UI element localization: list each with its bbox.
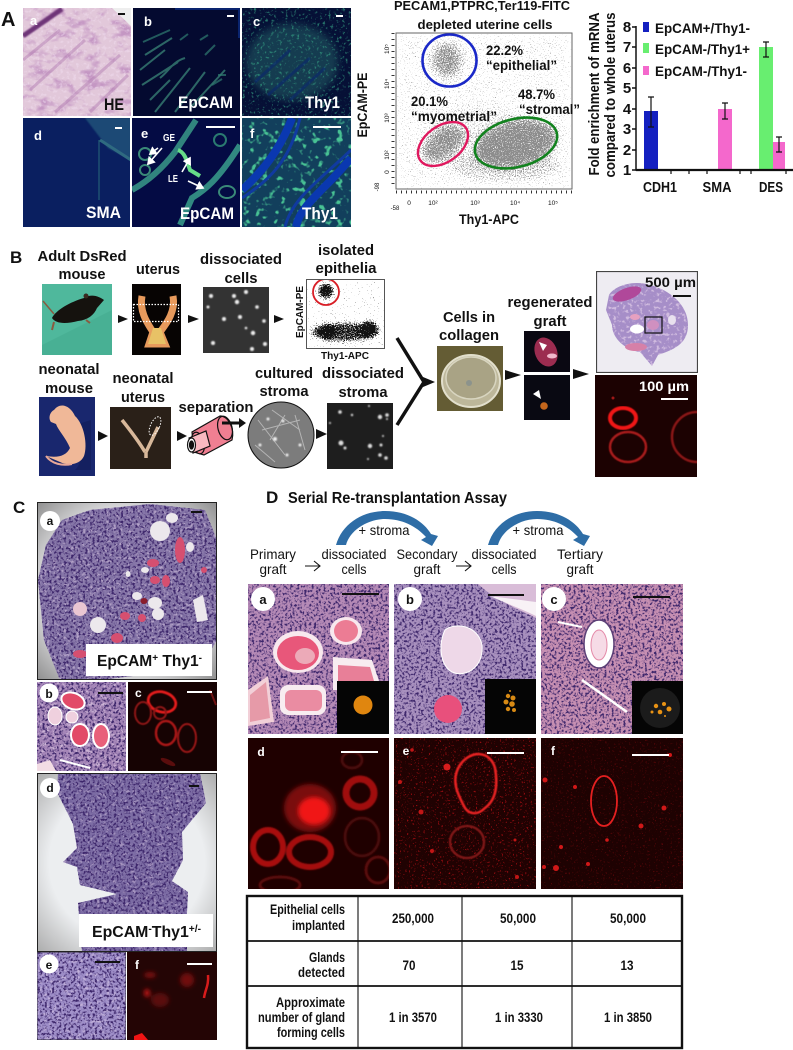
step label: separation: separation (178, 400, 254, 416)
flow plot title: depleted uterine cells (418, 17, 552, 32)
step label: adult mouse: Adult DsRed (38, 249, 127, 265)
micrograph b: EpCAM: b (144, 14, 152, 29)
micrograph f: Thy1: f (250, 126, 255, 141)
arrow: separation to culture (222, 418, 246, 428)
panel D title: Serial Re-transplantation Assay (288, 490, 507, 507)
histology a: primary graft (248, 584, 389, 734)
micrograph b: EpCAM: EpCAM (178, 93, 233, 112)
panel letter C: C (13, 498, 25, 517)
panel letter D: D (266, 488, 278, 507)
gate labels: “stromal” (519, 101, 580, 117)
row: gland forming cells: number of gland (258, 1010, 345, 1025)
fluorescence d: primary graft: d (257, 745, 265, 759)
row: gland forming cells (258, 995, 652, 1040)
results table (247, 896, 682, 1048)
row: epithelial cells implanted: 50,000 (500, 911, 536, 926)
micrograph d: SMA (23, 118, 130, 227)
graft series labels: Primary (250, 546, 296, 562)
step label: neonatal mouse: mouse (45, 381, 93, 397)
arrows: top row (98, 315, 327, 441)
y-axis title (587, 12, 619, 178)
micrograph a: HE (23, 8, 131, 116)
flow axes ticks and labels (375, 33, 572, 212)
bar category labels: DES (759, 180, 783, 196)
fluorescence e: secondary graft: e (403, 744, 410, 758)
flow x-axis label: Thy1-APC (459, 211, 519, 227)
row: epithelial cells implanted: implanted (292, 918, 345, 933)
panel B workflow (10, 243, 722, 477)
photo: dissociated cells (203, 287, 269, 353)
row: gland forming cells: forming cells (277, 1025, 345, 1040)
photo: neonatal mouse (39, 397, 95, 476)
histology e: stroma only: e (46, 958, 53, 972)
axis labels: isolated epithelia flow plot (295, 286, 369, 362)
fluorescence f: stroma only (127, 952, 217, 1040)
axis labels: isolated epithelia flow plot: EpCAM-PE (295, 286, 306, 338)
bar chart: fold enrichment (587, 12, 793, 196)
step label: isolated epithelia (316, 243, 377, 277)
axis labels: isolated epithelia flow plot: Thy1-APC (321, 351, 369, 362)
histology b: secondary graft: b (406, 592, 414, 607)
arrow: graft to histology (573, 369, 589, 379)
photo: graft on kidney (524, 331, 570, 372)
photo: cultured stroma dish (248, 402, 314, 468)
histology b: secondary graft (394, 584, 536, 734)
photo: dissociated stroma (327, 403, 393, 469)
step label: neonatal mouse (38, 362, 100, 397)
stroma labels: + stroma (512, 522, 564, 538)
gate labels (411, 42, 580, 124)
gate labels: 48.7% (518, 86, 556, 102)
step label: regenerated graft: graft (534, 314, 567, 330)
flow axes ticks and labels: 0 (407, 200, 411, 207)
step label: uterus: uterus (136, 262, 180, 278)
inset: orange graft (337, 681, 389, 734)
y-axis numbers: 7 (623, 39, 631, 56)
step label: neonatal mouse: neonatal (38, 362, 100, 378)
inset: dotted graft (632, 681, 683, 734)
micrograph c: Thy1: c (253, 14, 260, 29)
legend: EpCAM-/Thy1- (655, 63, 747, 79)
row: epithelial cells implanted: 50,000 (610, 911, 646, 926)
row: epithelial cells implanted (270, 902, 646, 933)
fluorescence f: tertiary graft: f (551, 744, 556, 758)
legend: EpCAM+/Thy1- (655, 20, 750, 36)
y-axis numbers: 8 (623, 19, 631, 36)
step label: neonatal uterus: neonatal (112, 371, 174, 387)
histology a: EpCAM+ Thy1- graft: a (47, 514, 54, 528)
step label: cultured stroma: stroma (260, 384, 309, 400)
fluorescence of graft: 100 µm (639, 378, 689, 394)
y-axis numbers (623, 19, 632, 179)
legend (643, 20, 750, 79)
graft series labels: dissociated (472, 546, 536, 562)
legend: EpCAM-/Thy1+ (655, 41, 750, 57)
histology of graft (596, 271, 698, 373)
histology d: EpCAM- Thy1+/- graft: - (148, 924, 152, 935)
histology d: EpCAM- Thy1+/- graft (37, 773, 217, 952)
flow axes ticks and labels: 10³ (384, 112, 391, 123)
y-axis title: Fold enrichment of mRNA (587, 12, 603, 176)
flow axes ticks and labels: 10⁴ (384, 79, 391, 89)
graft series labels: graft (566, 561, 594, 577)
micrograph a: HE: a (30, 13, 38, 28)
gate labels: 22.2% (486, 42, 524, 58)
micrograph e: EpCAM with GE and LE arrows: e (141, 126, 148, 141)
flow axes ticks and labels: 10⁵ (384, 44, 391, 54)
step label: regenerated graft: regenerated (508, 295, 592, 311)
gate: stromal (469, 110, 563, 176)
y-axis numbers: 5 (623, 80, 631, 97)
flow axes ticks and labels: 0 (384, 170, 391, 174)
y-axis numbers: 3 (623, 121, 631, 138)
fluorescence c: glands (128, 682, 217, 771)
histology d: EpCAM- Thy1+/- graft: d (46, 781, 54, 795)
histology b: glands (37, 682, 126, 771)
bar category labels: SMA (702, 180, 732, 196)
micrograph e: EpCAM with GE and LE arrows: LE (168, 173, 178, 185)
step label: cells in collagen: Cells in (443, 310, 495, 326)
bar category labels: CDH1 (643, 180, 677, 196)
flow axes ticks and labels: 10² (384, 149, 391, 160)
chevron: merging cell streams (397, 338, 435, 425)
fluorescence f: stroma only: f (135, 958, 140, 972)
flow plot title (394, 0, 571, 32)
histology d: EpCAM- Thy1+/- graft: Thy1 (152, 924, 189, 941)
y-axis numbers: 1 (623, 162, 631, 179)
micrograph c: Thy1 (242, 8, 351, 116)
panel D (247, 488, 683, 1048)
step label: isolated epithelia: epithelia (316, 261, 377, 277)
graft series labels: graft (260, 561, 287, 577)
icon: separation tube (188, 415, 235, 455)
row: epithelial cells implanted: 250,000 (392, 911, 434, 926)
row: glands detected (298, 950, 634, 980)
arrows between series labels (305, 561, 471, 571)
micrograph e: EpCAM with GE and LE arrows: EpCAM (180, 204, 234, 223)
step label: dissociated cells (200, 252, 282, 287)
curved arrow: second stroma addition (488, 511, 590, 546)
histology a: EpCAM+ Thy1- graft: EpCAM (97, 653, 152, 670)
y-axis numbers: 6 (623, 60, 631, 77)
y-axis title: compared to whole uterus (603, 12, 619, 178)
row: glands detected: 13 (620, 958, 634, 973)
micrograph e: EpCAM with GE and LE arrows (132, 118, 240, 227)
row: gland forming cells: 1 in 3570 (389, 1010, 437, 1025)
step label: dissociated cells: dissociated (200, 252, 282, 268)
arrow: dish to graft (505, 370, 521, 380)
y-axis numbers: 2 (623, 142, 631, 159)
gate labels: “myometrial” (411, 108, 497, 124)
fluorescence d: primary graft (248, 738, 389, 889)
row: gland forming cells: Approximate (276, 995, 345, 1010)
photo: collagen dish (437, 346, 503, 411)
step label: cells in collagen: collagen (439, 328, 499, 344)
micrograph e: EpCAM with GE and LE arrows: GE (163, 132, 175, 144)
step label: isolated epithelia: isolated (318, 243, 374, 259)
panel letter B: B (10, 248, 22, 267)
graft series labels: Tertiary (557, 546, 603, 562)
step label: adult mouse (38, 249, 127, 283)
micrograph c: Thy1: Thy1 (305, 93, 340, 112)
y-axis numbers: 4 (623, 101, 632, 118)
histology a: primary graft: a (259, 592, 267, 607)
micrograph a: HE: HE (104, 95, 124, 114)
photo: uterus with dotted region (132, 284, 181, 355)
bar category labels (643, 180, 783, 196)
micrograph f: Thy1 (242, 118, 351, 227)
flow cytometry scatter plot (354, 33, 580, 227)
flow y-axis label: EpCAM-PE (354, 72, 370, 138)
histology d: EpCAM- Thy1+/- graft: +/- (189, 924, 201, 935)
fluorescence of graft (595, 375, 697, 477)
axes and error bars (632, 26, 793, 174)
histology b: glands: b (45, 687, 53, 701)
photo: fluorescent graft (524, 375, 570, 420)
step label: cultured stroma: cultured (255, 366, 313, 382)
step label: regenerated graft (508, 295, 592, 330)
photo: neonatal uterus (110, 407, 171, 469)
row: gland forming cells: 1 in 3330 (495, 1010, 543, 1025)
graft series labels: Secondary (396, 546, 458, 562)
fluorescence f: tertiary graft (541, 738, 683, 889)
row: glands detected: detected (298, 965, 345, 980)
graft series labels: dissociated (322, 546, 386, 562)
histology of graft: 500 µm (645, 274, 696, 290)
row: glands detected: 15 (510, 958, 524, 973)
micrograph d: SMA: d (34, 128, 42, 143)
flow axes ticks and labels: 10⁵ (548, 200, 558, 207)
row: glands detected: Glands (309, 950, 345, 965)
flow axes ticks and labels: 10⁴ (510, 200, 520, 207)
micrograph b: EpCAM (133, 8, 240, 116)
step label: adult mouse: mouse (58, 267, 106, 283)
histology c: tertiary graft: c (550, 592, 558, 607)
graft series labels: graft (414, 561, 441, 577)
step label: dissociated cells: cells (224, 271, 258, 287)
step label: dissociated stroma: dissociated (322, 366, 404, 382)
step label: dissociated stroma (322, 366, 404, 401)
row: epithelial cells implanted: Epithelial cells (270, 902, 345, 917)
histology a: EpCAM+ Thy1- graft: - (199, 653, 202, 664)
flow axes ticks and labels: 10² (428, 200, 439, 207)
histology c: tertiary graft (541, 584, 683, 734)
gate labels: 20.1% (411, 93, 449, 109)
flow plot: isolated epithelia (306, 279, 385, 349)
graft series labels: cells (342, 561, 366, 577)
icon: white arrows to glands (148, 148, 203, 188)
micrograph d: SMA: SMA (86, 203, 121, 222)
photo: adult mouse (42, 284, 112, 355)
step label: dissociated stroma: stroma (338, 385, 388, 401)
gate: epithelial (422, 34, 476, 86)
row: glands detected: 70 (402, 958, 416, 973)
panel letter A: A (1, 9, 15, 31)
flow axes ticks and labels: -98 (375, 182, 381, 191)
step label: cells in collagen (439, 310, 499, 344)
curved arrow: first stroma addition (336, 511, 438, 546)
histology a: EpCAM+ Thy1- graft: Thy1 (158, 653, 199, 670)
graft series labels: cells (492, 561, 516, 577)
micrograph f: Thy1: Thy1 (302, 204, 338, 223)
gate: myometrial (410, 113, 476, 175)
row: gland forming cells: 1 in 3850 (604, 1010, 652, 1025)
flow axes ticks and labels: 10³ (470, 200, 481, 207)
gate labels: “epithelial” (486, 57, 557, 73)
step label: cultured stroma (255, 366, 313, 400)
step label: neonatal uterus: uterus (121, 390, 165, 406)
histology a: EpCAM+ Thy1- graft (37, 502, 217, 680)
histology d: EpCAM- Thy1+/- graft: EpCAM (92, 924, 147, 941)
stroma labels (358, 522, 564, 538)
fluorescence e: secondary graft (394, 738, 536, 889)
stroma labels: + stroma (358, 522, 410, 538)
inset: clustered graft (485, 679, 536, 734)
panel C (13, 498, 217, 1040)
fluorescence c: glands: c (135, 686, 142, 700)
graft series labels (250, 546, 603, 577)
histology e: stroma only (37, 952, 126, 1040)
flow axes ticks and labels: -58 (391, 206, 400, 212)
step label: neonatal uterus (112, 371, 174, 406)
bars (644, 47, 785, 170)
histology a: EpCAM+ Thy1- graft: + (152, 653, 158, 664)
